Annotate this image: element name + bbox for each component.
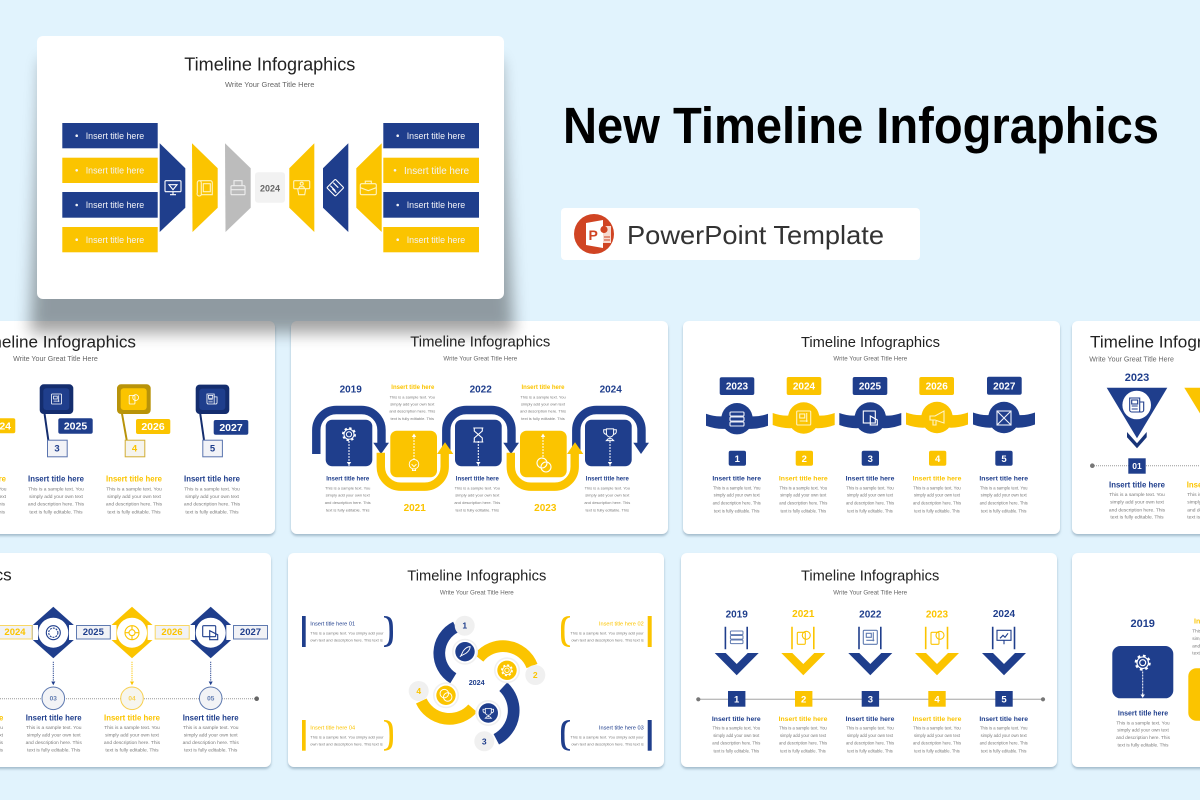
- lower text 2: Insert title here: [456, 476, 499, 482]
- step 3 text: [28, 475, 85, 515]
- year pills: [720, 377, 1022, 395]
- callout 03: This is a sample text. You simply add your: [570, 734, 644, 739]
- step text 5: Insert title here: [979, 476, 1028, 483]
- timeline dotted line: [1090, 458, 1200, 474]
- callout 01: Insert title here 01: [310, 621, 355, 627]
- step text 5: and description here. This: [980, 741, 1028, 746]
- step 5 text: simply add your own text: [185, 494, 240, 500]
- icon: PowerPoint logo: [574, 214, 614, 254]
- step text 3: simply add your own text: [847, 733, 894, 738]
- step 3 pin: [40, 384, 93, 457]
- callout 04: [302, 720, 393, 751]
- step text: and description here. This: [1116, 735, 1171, 740]
- step text 3: Insert title here: [846, 716, 895, 723]
- slide title: Timeline Infographics: [801, 335, 940, 351]
- step text 3: Insert title here: [846, 476, 895, 483]
- step text 4: text is fully editable. This: [914, 749, 960, 754]
- left title bars: Insert title here: [86, 200, 144, 210]
- slide subtitle: Write Your Great Title Here: [13, 355, 98, 363]
- year boxes: 2025: [83, 627, 105, 638]
- step text: This is a sample text. You: [1109, 492, 1165, 498]
- upper yellow text 1: text is fully editable. This: [391, 416, 434, 421]
- step text 5: text is fully editable. This: [981, 749, 1026, 754]
- year labels: 2021: [404, 503, 426, 514]
- year pills: 2026: [926, 382, 948, 392]
- number squares: 4: [935, 454, 941, 465]
- step text: [1116, 710, 1171, 747]
- step text 1: text is fully editable. This: [714, 749, 759, 754]
- panel: pinwheel slide: [288, 553, 664, 767]
- year labels: [726, 609, 1016, 621]
- step 5 text: and description here. This: [184, 501, 241, 507]
- step 5 pin: 2027: [219, 422, 243, 434]
- center year badge: [255, 172, 285, 203]
- slide title: Timeline Infographics: [410, 335, 550, 351]
- year boxes: 2024: [4, 627, 26, 638]
- lower text 1: This is a sample text. You: [325, 485, 370, 490]
- panel: ribbon slide: [683, 321, 1060, 534]
- step text 05: simply add your own text: [184, 732, 238, 738]
- step text 03: text is fully editable. This: [27, 748, 81, 754]
- step text 4: Insert title here: [913, 716, 962, 723]
- slide subtitle: Write Your Great Title Here: [440, 589, 514, 596]
- step 4 pin: 4: [132, 444, 138, 455]
- callout 04: Insert title here 04: [310, 725, 355, 731]
- year labels: 2023: [534, 503, 557, 514]
- right title bars: Insert title here: [407, 200, 465, 210]
- number squares: [729, 451, 1013, 466]
- lower text 2: [454, 476, 500, 512]
- step text 05: [183, 713, 239, 754]
- year labels: 2024: [600, 385, 622, 396]
- year labels: 2022: [470, 385, 492, 396]
- year boxes: [0, 626, 268, 639]
- PowerPoint badge: [561, 208, 920, 260]
- lower text 2: and description here. This: [454, 500, 500, 505]
- panel: snake arrow slide: [291, 321, 668, 534]
- step text 1: This is a sample text. You: [713, 485, 761, 490]
- partial step text: [0, 713, 4, 754]
- step 3 pin: 3: [54, 444, 60, 455]
- step text: Insert title here: [1118, 710, 1168, 717]
- step text 5: and description here. This: [980, 500, 1028, 505]
- step text 03: Insert title here: [26, 713, 82, 722]
- number squares: 1: [735, 454, 741, 465]
- timeline: 4: [934, 694, 940, 705]
- pinwheel chart: 2024: [469, 678, 485, 687]
- step text 05: Insert title here: [183, 713, 239, 722]
- step text 4: simply add your own text: [914, 493, 961, 498]
- step 3 text: and description here. This: [28, 501, 85, 507]
- lower text 1: and description here. This: [325, 500, 371, 505]
- step text 4: [913, 476, 962, 513]
- partial yellow step text: [0, 475, 7, 515]
- step 4 text: Insert title here: [106, 475, 163, 484]
- callout 02: This is a sample text. You simply add your: [570, 630, 644, 635]
- step squares: [326, 420, 632, 477]
- step text 2: and description here. This: [779, 500, 827, 505]
- step 4 text: simply add your own text: [107, 494, 162, 500]
- pinwheel chart: 1: [462, 621, 467, 631]
- funnel trapezoids: [160, 143, 382, 232]
- step 3 pin: 2025: [64, 421, 87, 433]
- year labels: 2019: [726, 610, 748, 621]
- step text 1: This is a sample text. You: [713, 726, 761, 731]
- step text 5: simply add your own text: [981, 493, 1028, 498]
- pinwheel chart: 4: [416, 686, 421, 696]
- step text 2: simply add your own text: [780, 733, 827, 738]
- number squares: 3: [868, 454, 873, 465]
- step text 04: text is fully editable. This: [105, 748, 159, 754]
- year pills: 2024: [793, 382, 816, 392]
- year pills: 2025: [859, 382, 882, 392]
- step text 04: simply add your own text: [105, 732, 160, 738]
- upper yellow text 2: text is fully editable. This: [521, 416, 565, 421]
- step text 2: [779, 476, 828, 513]
- step 5 text: text is fully editable. This: [185, 509, 239, 515]
- panel: rounded square slide: [1072, 553, 1200, 767]
- step text 1: [712, 716, 761, 754]
- step text 3: text is fully editable. This: [847, 749, 893, 754]
- step text 3: This is a sample text. You: [846, 726, 894, 731]
- upper yellow text 1: simply add your own text: [390, 402, 435, 407]
- step text 5: simply add your own text: [981, 733, 1028, 738]
- step text 5: [979, 476, 1028, 513]
- year labels: 2023: [926, 610, 949, 621]
- triangle with icon: [1107, 388, 1167, 448]
- center year badge: 2024: [260, 183, 280, 193]
- lower text 3: [584, 476, 630, 512]
- step text 05: and description here. This: [183, 740, 239, 746]
- upper yellow text 2: and description here. This: [520, 409, 566, 414]
- left title bars: [62, 123, 158, 252]
- step text 2: simply add your own text: [780, 493, 827, 498]
- step text 4: Insert title here: [913, 476, 962, 483]
- step text: text is fully editable. This: [1118, 742, 1169, 747]
- step 4 text: and description here. This: [106, 501, 163, 507]
- lower text 2: simply add your own text: [455, 493, 500, 498]
- step text 1: simply add your own text: [713, 733, 760, 738]
- lower text 3: simply add your own text: [585, 493, 630, 498]
- panel: triangle slide: [1072, 321, 1200, 534]
- upper yellow text 1: and description here. This: [389, 409, 435, 414]
- step text: simply add your own text: [1117, 728, 1169, 733]
- step text 5: This is a sample text. You: [980, 485, 1028, 490]
- timeline with nodes: 05: [207, 696, 215, 703]
- chevrons: [715, 653, 1026, 675]
- callout 04: This is a sample text. You simply add your: [310, 734, 384, 739]
- timeline: 2: [801, 694, 806, 705]
- year pills: 2027: [993, 382, 1016, 392]
- callout 01: own text and description here. This text is: [310, 637, 383, 642]
- step text 2: This is a sample text. You: [779, 726, 827, 731]
- year labels: 2021: [792, 609, 815, 620]
- year boxes: 2026: [161, 627, 183, 638]
- partial 2024 label: [0, 418, 15, 433]
- trapezoid icons: [165, 179, 376, 196]
- callout 03: own text and description here. This text is: [571, 741, 644, 746]
- upper yellow text 1: [389, 385, 435, 421]
- timeline: 5: [1001, 694, 1007, 705]
- callout 02: Insert title here 02: [599, 621, 644, 627]
- step text 03: simply add your own text: [27, 732, 81, 738]
- step 5 pin: 5: [210, 444, 216, 455]
- icon: PowerPoint logo: P: [588, 227, 598, 243]
- year pills: 2023: [726, 382, 749, 392]
- step text 1: and description here. This: [713, 500, 761, 505]
- step text 3: simply add your own text: [847, 493, 894, 498]
- main heading: New Timeline Infographics: [563, 97, 1159, 154]
- step 3 text: simply add your own text: [29, 494, 84, 500]
- step text 1: text is fully editable. This: [714, 508, 759, 513]
- step text 5: Insert title here: [979, 716, 1028, 723]
- upper yellow text 2: [520, 385, 566, 421]
- step 4 text: [106, 475, 163, 515]
- pinwheel chart: [409, 616, 545, 751]
- upper yellow text 2: Insert title here: [521, 385, 565, 391]
- year label: 2019: [1130, 618, 1155, 630]
- lower text 1: [325, 476, 371, 512]
- hexagon 04: [112, 607, 153, 658]
- panel: chevron slide: [681, 553, 1057, 767]
- callout 02: [561, 616, 652, 647]
- timeline with nodes: 03: [50, 696, 57, 703]
- lower text 3: This is a sample text. You: [585, 485, 630, 490]
- lower text 2: This is a sample text. You: [455, 485, 500, 490]
- step text: and description here. This: [1109, 507, 1166, 513]
- step text: text is fully editable. This: [1110, 515, 1164, 521]
- step text 2: This is a sample text. You: [780, 485, 828, 490]
- step text: This is a sample text. You: [1116, 720, 1170, 725]
- step text 04: Insert title here: [104, 713, 161, 722]
- step text: [1109, 481, 1166, 521]
- lower text 2: text is fully editable. This: [456, 507, 499, 512]
- step text 4: This is a sample text. You: [913, 726, 961, 731]
- step text 3: This is a sample text. You: [846, 485, 894, 490]
- badge text: PowerPoint Template: [627, 220, 884, 250]
- step text 3: [846, 716, 895, 754]
- step text 03: and description here. This: [26, 740, 82, 746]
- step text 1: Insert title here: [712, 716, 761, 723]
- year labels: [340, 385, 622, 514]
- step 5 text: Insert title here: [184, 475, 241, 484]
- step text 5: This is a sample text. You: [980, 726, 1028, 731]
- step text 2: Insert title here: [779, 476, 828, 483]
- lower text 3: and description here. This: [584, 500, 630, 505]
- lower text 3: Insert title here: [586, 476, 629, 482]
- callout 01: This is a sample text. You simply add your: [310, 630, 384, 635]
- step text 4: This is a sample text. You: [913, 485, 961, 490]
- timeline: [696, 691, 1045, 707]
- pinwheel chart: 2: [533, 670, 538, 680]
- upper yellow text 2: simply add your own text: [521, 402, 566, 407]
- callout 03: [561, 720, 652, 751]
- step text 5: text is fully editable. This: [981, 508, 1026, 513]
- callout 02: own text and description here. This text is: [571, 637, 644, 642]
- step 4 pin: 2026: [141, 421, 165, 433]
- left title bars: Insert title here: [86, 166, 144, 176]
- year labels: 2024: [993, 609, 1016, 620]
- step text 4: simply add your own text: [914, 733, 961, 738]
- ribbons with icons: [706, 402, 1035, 434]
- slide title: Timeline Infographics: [184, 55, 355, 75]
- callout 03: Insert title here 03: [599, 725, 644, 731]
- step text 2: text is fully editable. This: [780, 749, 826, 754]
- step 3 text: Insert title here: [28, 475, 85, 484]
- callout 04: own text and description here. This text is: [310, 741, 383, 746]
- panel: steps slide, row 2 left: [0, 321, 275, 534]
- step text 3: text is fully editable. This: [847, 508, 893, 513]
- main card shadow: [30, 60, 514, 333]
- step text 2: Insert title here: [779, 716, 828, 723]
- step text 1: and description here. This: [712, 741, 760, 746]
- step text: simply add your own text: [1110, 499, 1165, 505]
- step 5 text: This is a sample text. You: [184, 486, 240, 492]
- step text 1: Insert title here: [712, 476, 761, 483]
- yellow triangle: [1184, 388, 1200, 438]
- panel: hexagon slide: [0, 553, 271, 767]
- slide title: Timeline Infographics: [407, 569, 546, 585]
- timeline: 3: [868, 694, 873, 705]
- step text 3: [846, 476, 895, 513]
- yellow step text: [1187, 481, 1200, 521]
- step 4 text: This is a sample text. You: [106, 486, 162, 492]
- step text 03: This is a sample text. You: [26, 725, 82, 731]
- step text 04: [104, 713, 161, 754]
- callout 01: [302, 616, 393, 647]
- step text 4: and description here. This: [913, 500, 961, 505]
- slide subtitle: Write Your Great Title Here: [225, 80, 314, 89]
- timeline: 1: [734, 694, 740, 705]
- hexagon 03: [33, 607, 74, 658]
- step text 05: This is a sample text. You: [183, 725, 239, 731]
- step text 3: and description here. This: [846, 500, 894, 505]
- step 4 text: text is fully editable. This: [107, 509, 161, 515]
- slide subtitle: Write Your Great Title Here: [443, 355, 518, 362]
- icon columns: [725, 627, 1014, 649]
- lower text 1: Insert title here: [326, 476, 370, 482]
- step 4 pin: [117, 384, 170, 457]
- step text 03: [26, 713, 82, 754]
- left title bars: Insert title here: [86, 131, 144, 141]
- step text 4: [913, 716, 962, 754]
- step 3 text: text is fully editable. This: [29, 509, 83, 515]
- square icons and dotted arrows: [343, 428, 616, 472]
- number squares: 5: [1001, 454, 1007, 465]
- right title bars: Insert title here: [407, 235, 465, 245]
- lower text 1: simply add your own text: [326, 493, 371, 498]
- year labels: 2022: [859, 610, 882, 621]
- step 5 text: [184, 475, 241, 515]
- step text: Insert title here: [1109, 481, 1166, 490]
- step text 3: and description here. This: [846, 741, 894, 746]
- lower text 1: text is fully editable. This: [326, 507, 369, 512]
- hexagon 05: [190, 607, 232, 658]
- slide subtitle: Write Your Great Title Here: [833, 355, 908, 362]
- year boxes: 2027: [240, 627, 261, 638]
- left title bars: Insert title here: [86, 235, 144, 245]
- step text 2: and description here. This: [779, 741, 827, 746]
- upper yellow text 1: Insert title here: [391, 385, 435, 391]
- panel: main timeline slide: [37, 36, 504, 299]
- step text 05: text is fully editable. This: [184, 748, 238, 754]
- number squares: 2: [802, 454, 807, 465]
- upper yellow text 1: This is a sample text. You: [390, 394, 435, 399]
- step text 2: [779, 716, 828, 754]
- lower text 3: text is fully editable. This: [586, 507, 629, 512]
- timeline dotted line: 01: [1132, 461, 1142, 471]
- year label: 2023: [1125, 372, 1149, 384]
- step text 1: [712, 476, 761, 513]
- slide title: Timeline Infographics: [801, 569, 939, 585]
- slide subtitle: Write Your Great Title Here: [1089, 355, 1174, 363]
- step text 04: and description here. This: [104, 740, 161, 746]
- timeline with nodes: [0, 662, 259, 710]
- yellow step text: [1192, 619, 1200, 656]
- step text 1: simply add your own text: [714, 493, 761, 498]
- navy arrows: [316, 410, 649, 454]
- timeline with nodes: 04: [128, 696, 136, 703]
- upper yellow text 2: This is a sample text. You: [520, 394, 566, 399]
- right title bars: Insert title here: [404, 166, 470, 177]
- step 5 pin: [196, 385, 248, 457]
- yellow arrows: [381, 442, 583, 487]
- step 3 text: This is a sample text. You: [28, 486, 84, 492]
- slide subtitle: Write Your Great Title Here: [833, 589, 908, 596]
- step text 4: and description here. This: [913, 741, 961, 746]
- step text 2: text is fully editable. This: [781, 508, 826, 513]
- step text 5: [979, 716, 1028, 754]
- step text 04: This is a sample text. You: [104, 725, 160, 731]
- yellow square: [1188, 668, 1200, 721]
- right title bars: [383, 123, 479, 252]
- step text 4: text is fully editable. This: [914, 508, 960, 513]
- year labels: 2019: [340, 385, 362, 396]
- navy square with gear: [1112, 646, 1173, 698]
- right title bars: Insert title here: [407, 131, 465, 141]
- pinwheel chart: 3: [482, 736, 487, 746]
